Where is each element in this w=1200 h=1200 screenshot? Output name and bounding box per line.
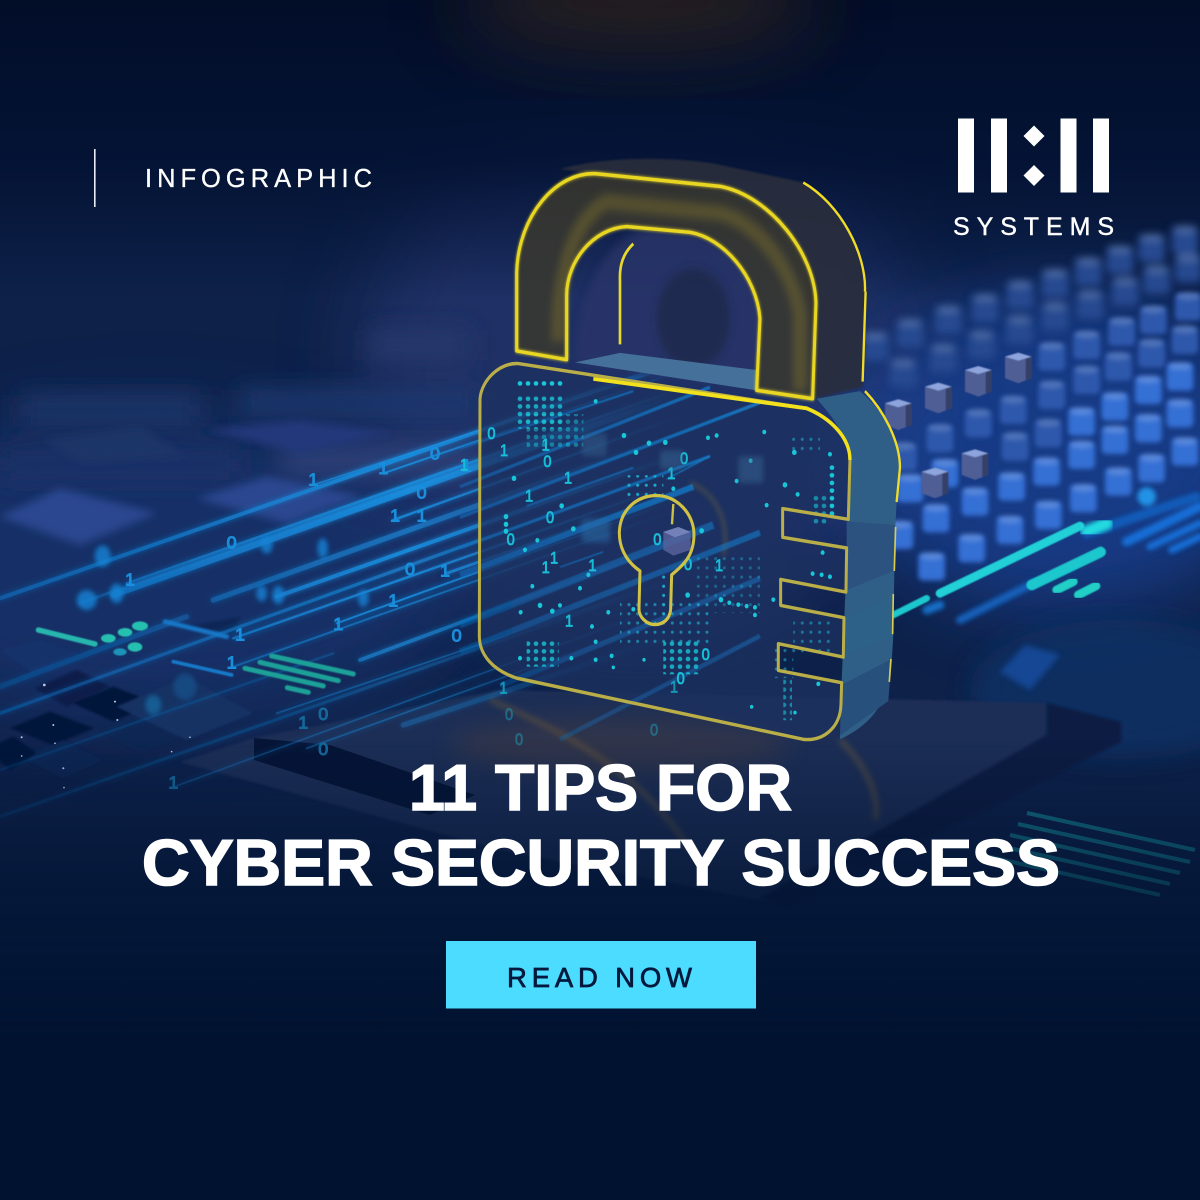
keyhole glow and interior data: 1 (564, 470, 572, 488)
data streaks and binary digits, left: 1 (227, 652, 237, 672)
keyhole glow and interior data: 1 (460, 457, 468, 475)
keyhole glow and interior data: 1 (500, 442, 508, 460)
button: read now: READ NOW (507, 962, 692, 993)
data streaks and binary digits, left: 0 (417, 482, 427, 502)
keyhole glow and interior data: 1 (499, 680, 507, 698)
blurred data cubes, right (862, 225, 1200, 581)
keyhole glow and interior data: 1 (588, 557, 596, 575)
infographic label: INFOGRAPHIC (145, 165, 372, 193)
data streaks and binary digits, left: 0 (405, 559, 415, 579)
data streaks and binary digits, left: 0 (430, 443, 440, 463)
body outline (479, 363, 850, 740)
logo: 11:11 Systems: SYSTEMS (953, 213, 1114, 241)
data streaks and binary digits, left: 1 (440, 561, 450, 581)
keyhole glow and interior data: 0 (487, 425, 496, 443)
keyhole glow and interior data: 1 (565, 613, 573, 631)
keyhole glow and interior data: 1 (550, 549, 558, 568)
data streaks and binary digits, left: 0 (227, 532, 237, 552)
data streaks and binary digits, left: 1 (298, 712, 308, 732)
padlock yellow outlines (479, 174, 850, 740)
data streaks and binary digits, left: 1 (417, 506, 427, 526)
keyhole glow and interior data: 1 (542, 559, 550, 577)
keyhole glow and interior data: 0 (515, 731, 523, 749)
blurred circuit chips, left (0, 420, 393, 788)
keyhole glow and interior data: 0 (653, 531, 662, 549)
keyhole glow and interior data: 1 (670, 679, 678, 697)
keyhole glow and interior data (460, 379, 836, 749)
data streaks and binary digits, left: 1 (125, 570, 135, 590)
keyhole glow and interior data: 1 (667, 465, 675, 483)
title: CYBER SECURITY SUCCESS (142, 826, 1060, 899)
keyhole glow and interior data: 0 (505, 706, 513, 724)
padlock body glass (479, 363, 850, 740)
data streaks and binary digits, left: 1 (235, 625, 245, 645)
chip platform under lock (180, 645, 1195, 908)
data streaks and binary digits, left: 0 (452, 626, 462, 646)
data streaks and binary digits, left: 1 (333, 614, 343, 634)
title (142, 751, 1060, 899)
keyhole glow and interior data: 0 (677, 670, 685, 688)
title: 11 TIPS FOR (409, 751, 792, 824)
data streaks and binary digits, left: 0 (318, 739, 328, 759)
keyhole glow and interior data: 0 (684, 556, 692, 574)
shackle front (517, 174, 816, 399)
data streaks and binary digits, left: 1 (168, 772, 178, 792)
data streaks and binary digits, left: 1 (388, 591, 398, 611)
keyhole glow and interior data: 1 (542, 437, 550, 455)
keyhole glow and interior data: 0 (680, 450, 688, 468)
data streaks and binary digits, left (0, 360, 700, 817)
keyhole glow and interior data: 0 (543, 453, 552, 471)
keyhole outline (619, 496, 694, 625)
bottom fade to navy (0, 740, 1200, 1060)
data streaks and binary digits, left: 1 (378, 458, 388, 478)
logo: 11:11 Systems (953, 118, 1114, 241)
data streaks and binary digits, left: 1 (462, 456, 472, 476)
button: read now (446, 941, 756, 1008)
keyhole glow and interior data: 1 (525, 487, 533, 506)
keyhole glow and interior data: 0 (702, 646, 710, 664)
padlock back faces (560, 159, 900, 739)
data streaks and binary digits, left: 1 (308, 470, 318, 490)
keyhole glow and interior data: 1 (715, 557, 723, 575)
data streaks and binary digits, left: 0 (318, 704, 328, 724)
data streaks and binary digits, left: 1 (390, 506, 400, 526)
keyhole glow and interior data: 0 (546, 509, 554, 527)
keyhole glow and interior data: 0 (507, 531, 515, 549)
glowing bars, right (893, 487, 1200, 620)
keyhole glow and interior data: 0 (650, 722, 658, 740)
padlock (460, 159, 900, 749)
